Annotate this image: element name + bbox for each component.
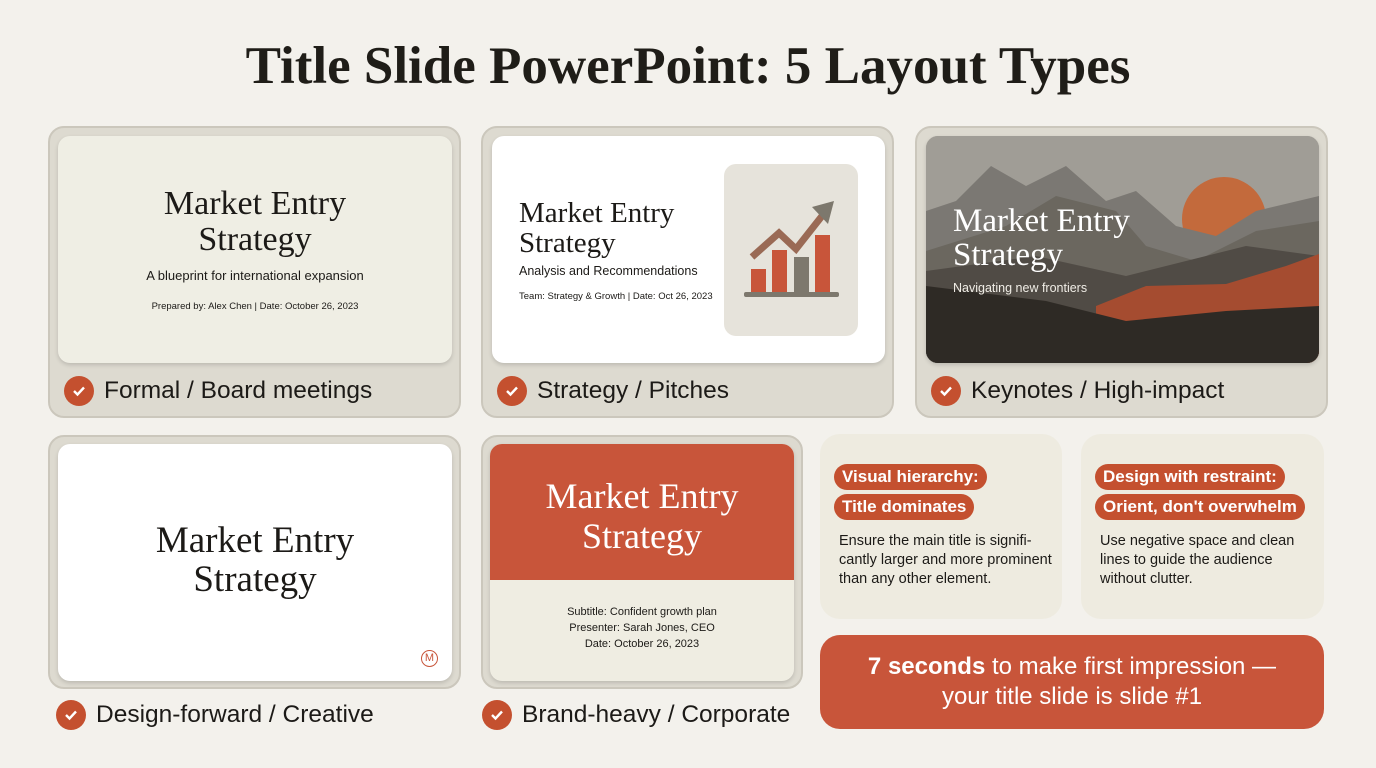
slide: strategy: Market Entry	[519, 197, 674, 229]
title: Title Slide PowerPoint: 5 Layout Types	[246, 37, 1130, 95]
text: restraint	[1100, 533, 1294, 587]
panel: formal	[48, 126, 461, 418]
callout: 7 seconds: your title slide is slide #1	[942, 683, 1202, 710]
text: visual hierarchy: Ensure the main title is signifi-	[839, 533, 1032, 549]
callout: 7 seconds	[820, 635, 1324, 729]
slide: strategy: Team: Strategy & Growth | Date: Oct 26, 2023	[519, 291, 713, 302]
slide: formal: A blueprint for international expansion	[146, 268, 364, 283]
text: visual hierarchy: cantly larger and more prominent	[839, 552, 1052, 568]
slide: design-forward: Strategy	[193, 559, 317, 600]
label: keynote: Keynotes / High-impact	[971, 377, 1224, 404]
panel: design-forward	[48, 435, 461, 689]
label: strategy: Strategy / Pitches	[537, 377, 729, 404]
slide: keynote landscape: Strategy	[953, 237, 1063, 273]
icon: growth chart	[724, 164, 858, 336]
slide: strategy: Strategy	[519, 227, 616, 259]
slide: strategy	[492, 136, 885, 363]
slide: brand-heavy: Market Entry	[546, 476, 738, 516]
panel: brand-heavy	[481, 435, 803, 689]
label: formal: Formal / Board meetings	[104, 377, 372, 404]
text: restraint: lines to guide the audience	[1100, 552, 1273, 568]
pill: visual hierarchy: Visual hierarchy:	[842, 467, 979, 486]
label: brand-heavy: Brand-heavy / Corporate	[522, 701, 790, 728]
pill: visual hierarchy	[834, 464, 987, 520]
pill: restraint: Design with restraint:	[1103, 467, 1277, 486]
slide: design-forward	[58, 444, 452, 681]
panel: strategy	[481, 126, 894, 418]
slide: brand-heavy: Presenter: Sarah Jones, CEO	[569, 622, 715, 634]
slide: brand-heavy: Subtitle: Confident growth plan	[567, 606, 717, 618]
pill: restraint	[1095, 464, 1305, 520]
slide: brand-heavy: Date: October 26, 2023	[585, 638, 699, 650]
slide: formal: Prepared by: Alex Chen | Date: October 26, 2023	[152, 301, 358, 312]
text: restraint: without clutter.	[1100, 571, 1193, 587]
icon: logo mark: M	[425, 652, 434, 664]
slide: design-forward: Market Entry	[156, 520, 354, 561]
slide: brand-heavy	[490, 444, 794, 681]
slide: formal	[58, 136, 452, 363]
tip: restraint	[1081, 434, 1324, 619]
tip: visual hierarchy	[820, 434, 1062, 619]
slide: brand-heavy: Strategy	[582, 516, 702, 556]
pill: visual hierarchy: Title dominates	[842, 497, 966, 516]
label: design-forward: Design-forward / Creative	[96, 701, 374, 728]
text: visual hierarchy	[839, 533, 1052, 587]
panel: keynote	[915, 126, 1328, 418]
slide: keynote landscape: Navigating new frontiers	[953, 281, 1087, 295]
slide: formal: Strategy	[198, 221, 312, 258]
icon: logo mark	[421, 650, 438, 667]
pill: restraint: Orient, don't overwhelm	[1103, 497, 1297, 516]
text: visual hierarchy: than any other element.	[839, 571, 991, 587]
slide: keynote landscape: Market Entry	[953, 203, 1130, 239]
slide: strategy: Analysis and Recommendations	[519, 264, 698, 278]
slide: keynote landscape	[926, 136, 1319, 363]
slide: formal: Market Entry	[164, 185, 346, 222]
callout: 7 seconds: 7 seconds to make first impression —	[868, 653, 1276, 680]
text: restraint: Use negative space and clean	[1100, 533, 1294, 549]
